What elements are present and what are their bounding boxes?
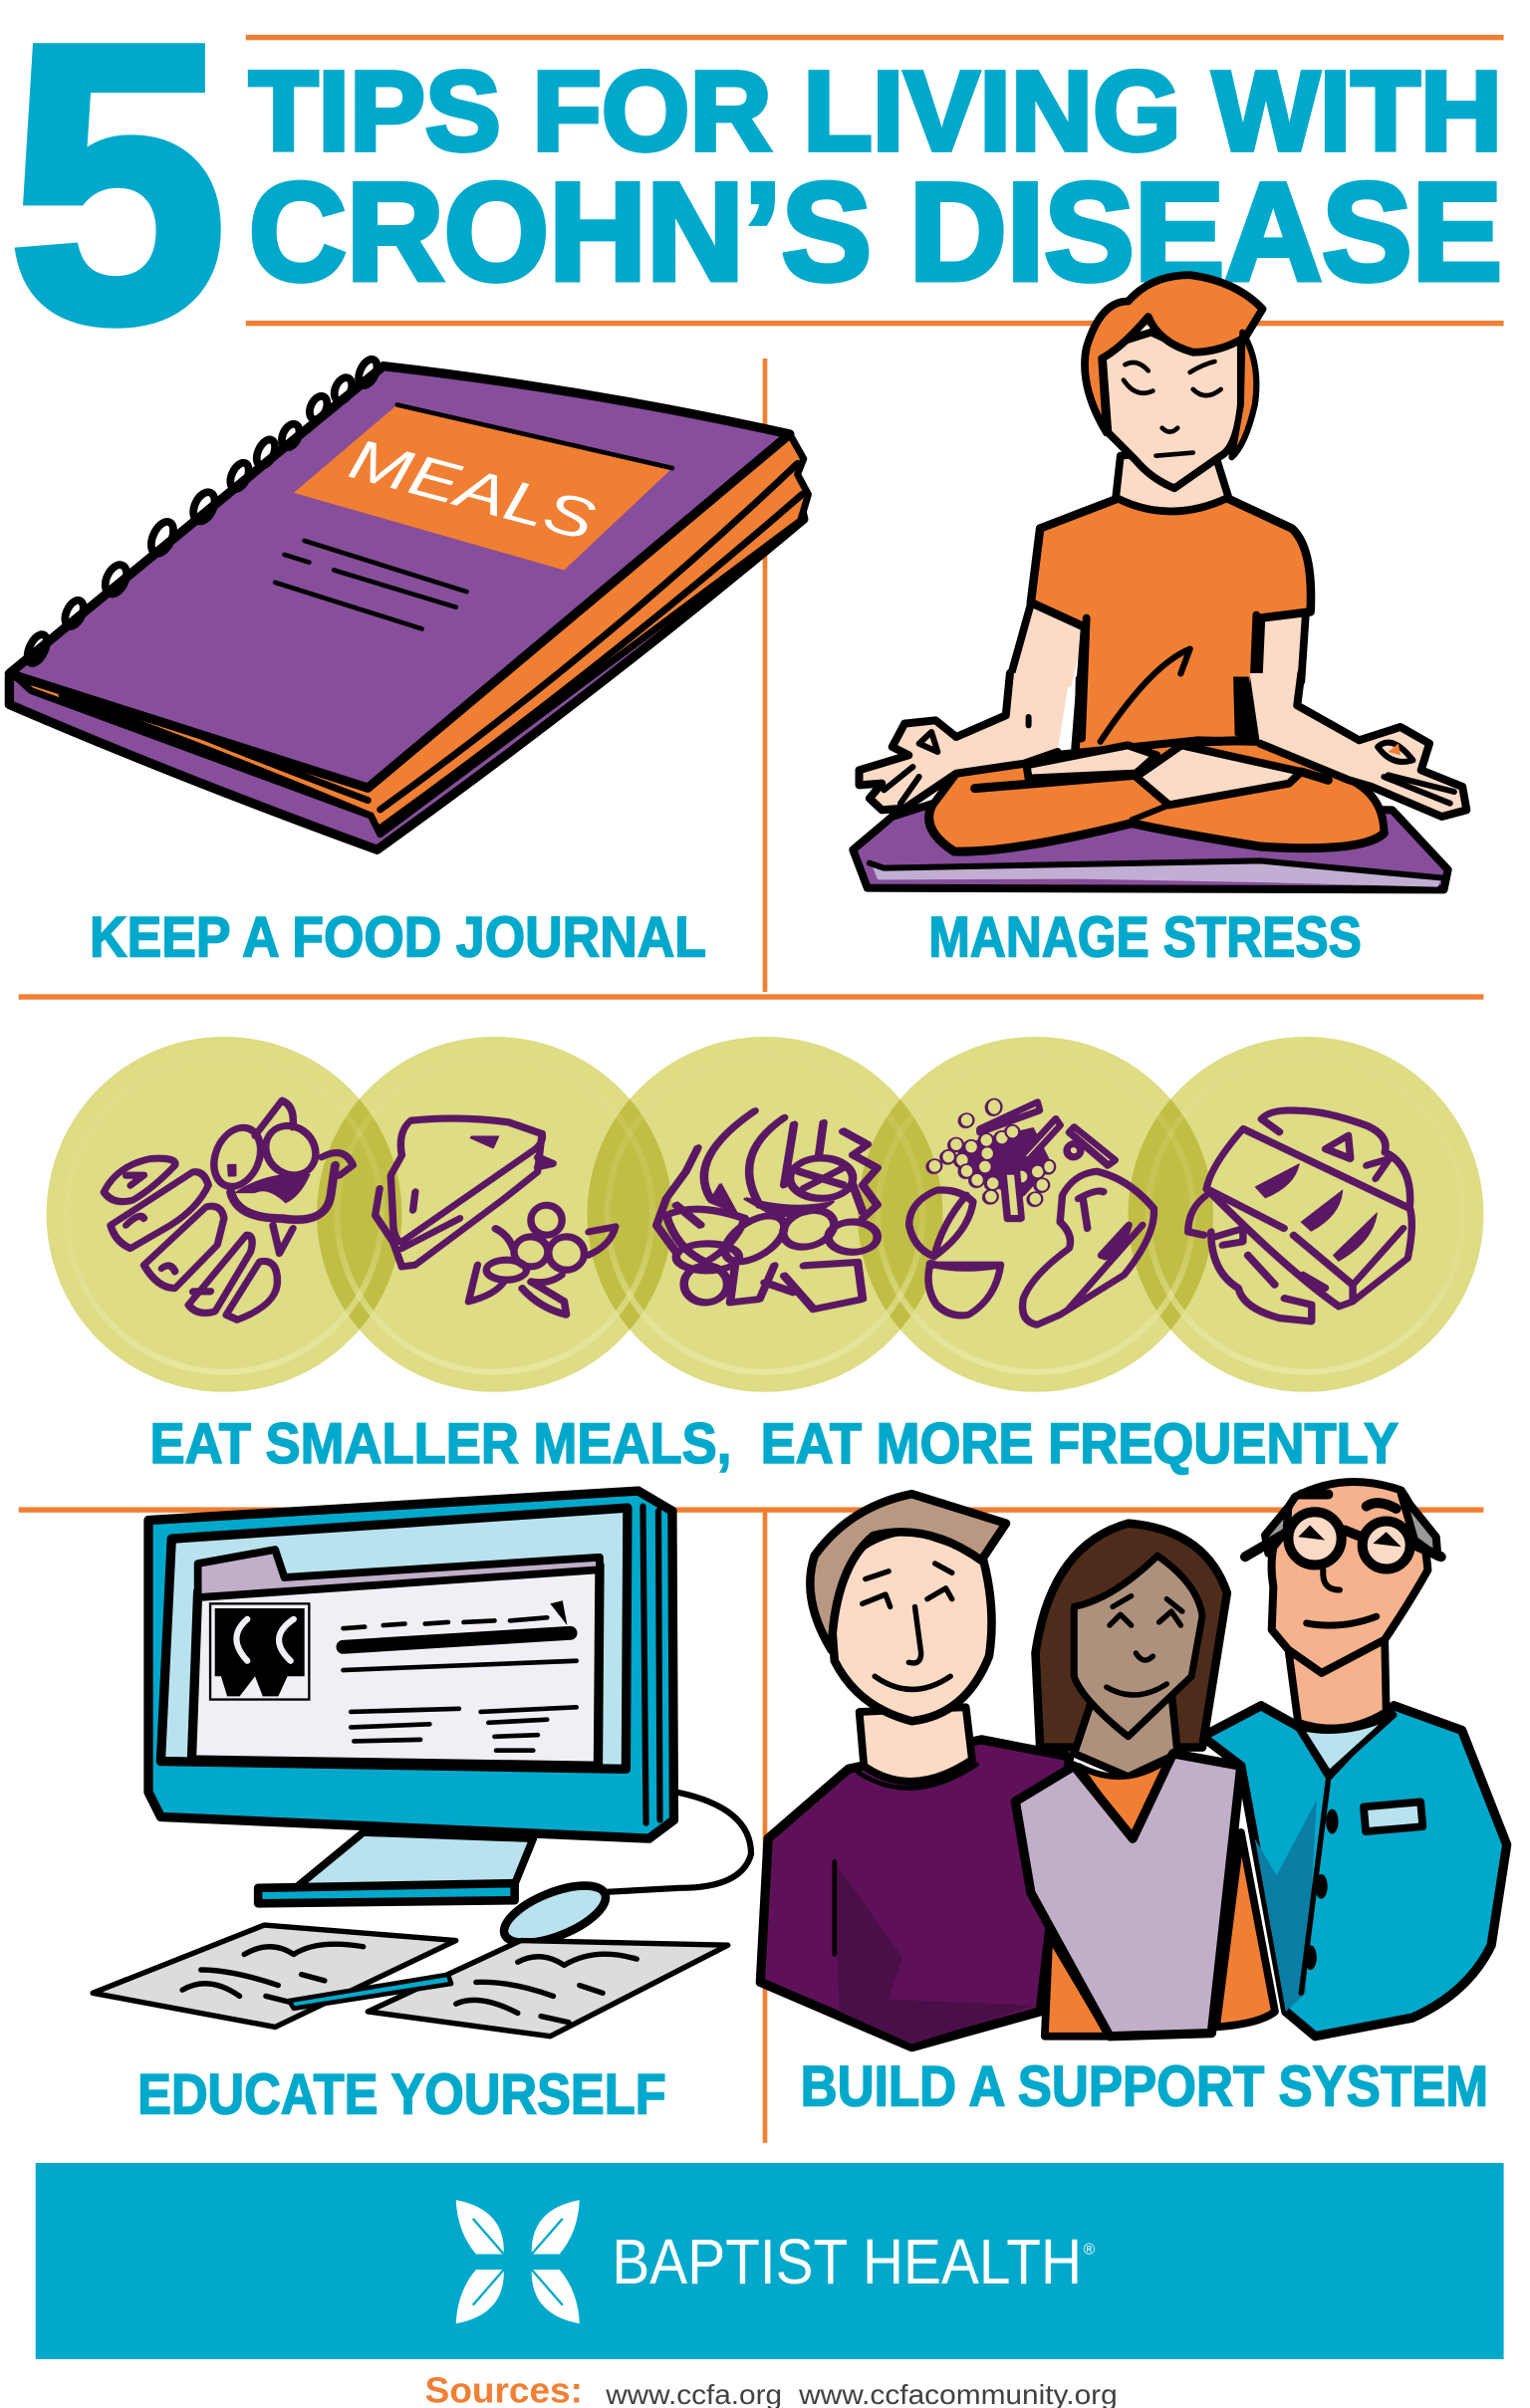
panel: smaller meals: [47, 1037, 1483, 1476]
person: young man: [760, 1494, 1070, 2047]
papers and pen: [93, 1925, 728, 2037]
older man's head: [1245, 1482, 1441, 1673]
icon: meditating person: [853, 275, 1466, 889]
logo: leaves: [456, 2200, 580, 2323]
icon: spiral binding: [24, 357, 381, 666]
panel: support system: [760, 1482, 1507, 2119]
heading: keep a food journal: KEEP A FOOD JOURNAL: [90, 905, 706, 969]
heading: eat smaller meals: EAT SMALLER MEALS, EAT MORE FREQUENTLY: [150, 1412, 1399, 1476]
food: large sandwich: [1188, 1110, 1412, 1322]
banner: ®: [1084, 2241, 1096, 2258]
neck and head: [1116, 448, 1228, 512]
person: older man: [1202, 1482, 1507, 2037]
banner: [36, 2163, 1504, 2359]
icon: computer: [93, 1491, 751, 2037]
title line 2: CROHN’S DISEASE: [249, 154, 1502, 310]
illustration: support people: [760, 1482, 1507, 2047]
panel: manage stress: [853, 275, 1466, 969]
shirt: [1031, 498, 1311, 765]
title line 1: TIPS FOR LIVING WITH: [249, 47, 1502, 173]
notebook label: [294, 404, 672, 570]
mouse: [497, 1874, 613, 1955]
panel: educate yourself: [93, 1491, 751, 2126]
icon: notebook: [9, 357, 808, 849]
upper arms: [1009, 604, 1085, 687]
food: salad: [657, 1110, 879, 1309]
legs, hands and feet: [860, 673, 1466, 851]
person: woman: [1015, 1524, 1275, 2037]
food: sandwich and fruit: [376, 1118, 616, 1315]
plates: [47, 1037, 1483, 1392]
web page logo: [210, 1603, 309, 1700]
notebook label: MEALS: [343, 427, 602, 553]
title: [8, 0, 1502, 404]
food: grapes, apple and steak: [909, 1099, 1154, 1324]
heading: educate yourself: EDUCATE YOURSELF: [137, 2062, 666, 2126]
logo: wordmark: BAPTIST HEALTH: [612, 2227, 1082, 2297]
yoga mat: [853, 804, 1448, 889]
panel: food journal: [9, 357, 808, 969]
food: potatoes and fruit: [105, 1100, 354, 1320]
heading: manage stress: MANAGE STRESS: [928, 905, 1362, 969]
sources: [425, 2370, 1118, 2408]
